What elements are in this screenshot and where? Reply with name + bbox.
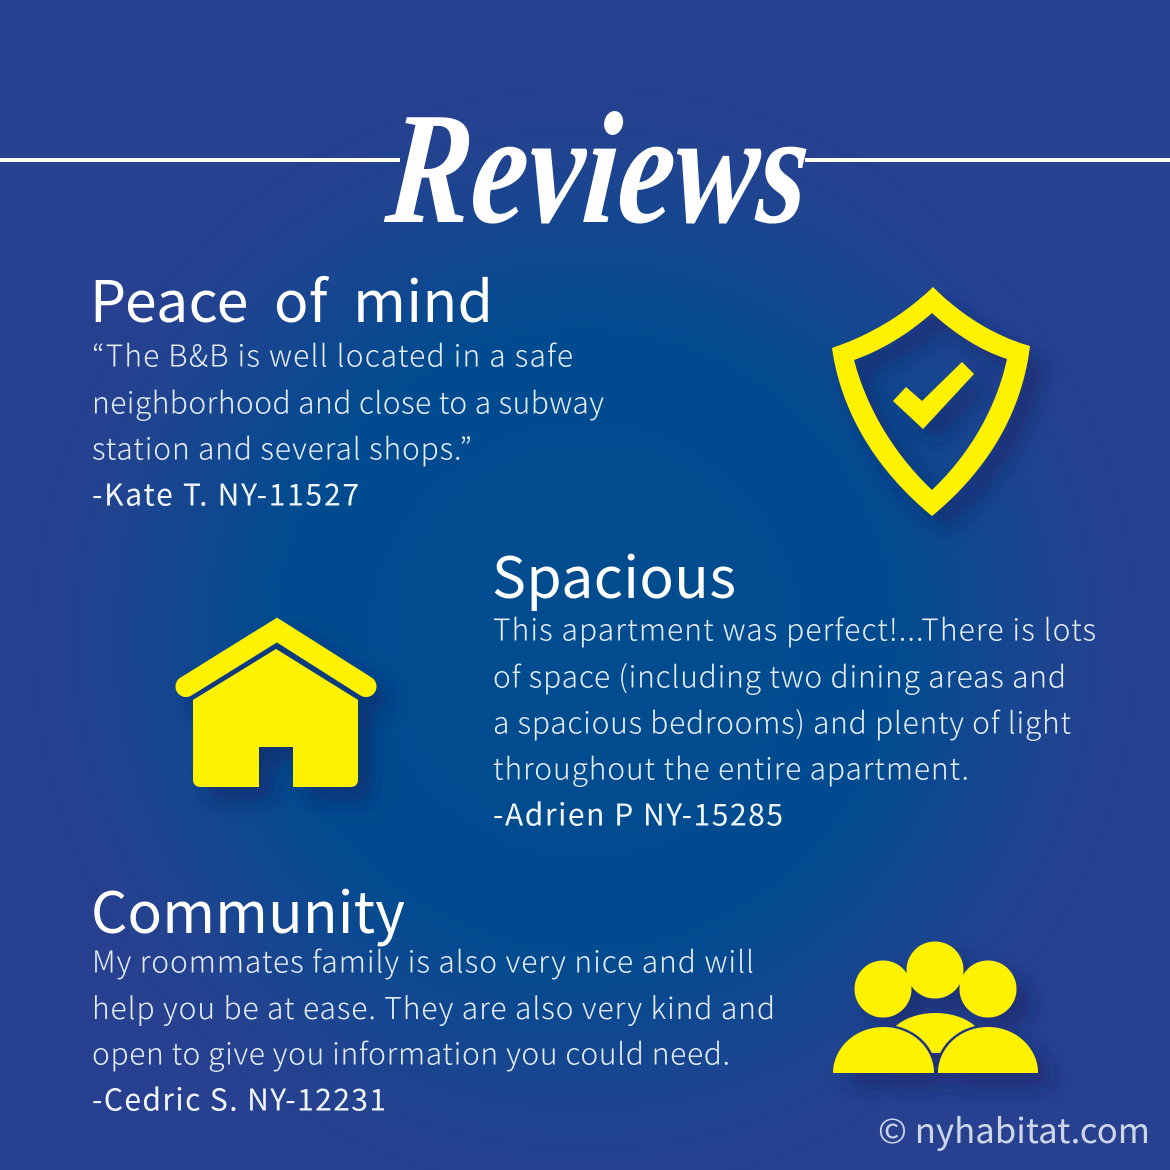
title rule right [805,158,1170,162]
quote: spacious [493,606,1096,789]
icon: group of people [833,942,1038,1073]
icon: shield with check mark [832,287,1030,516]
heading: peace of mind: Peace of mind [90,257,493,339]
attribution: Cedric S.: -Cedric S. NY-12231 [92,1076,386,1120]
panel: peace of mind [90,257,604,515]
quote: community: My roommates family is also very nice and will [92,938,754,982]
quote: spacious: a spacious bedrooms) and plenty of light [493,698,1071,742]
title: Reviews [380,79,816,257]
panel: community [91,868,775,1120]
quote: community: help you be at ease. They are also very kind and [92,984,775,1028]
quote: spacious: of space (including two dining areas and [493,652,1066,696]
attribution: Kate T.: -Kate T. NY-11527 [92,471,359,515]
quote: peace of mind [92,332,604,469]
heading: spacious: Spacious [492,533,736,615]
quote: spacious: This apartment was perfect!...There is lots [493,606,1096,650]
panel: spacious [492,533,1096,835]
title rule left [0,158,400,162]
heading: community: Community [91,868,405,950]
quote: spacious: throughout the entire apartment. [493,745,969,789]
quote: community: open to give you information you could need. [92,1030,730,1074]
quote: community [92,938,775,1074]
attribution: Adrien P: -Adrien P NY-15285 [493,791,783,835]
watermark: © nyhabitat.com [878,1104,1150,1153]
quote: peace of mind: station and several shops.” [92,425,472,469]
quote: peace of mind: “The B&B is well located in a safe [92,332,573,376]
icon: house [186,630,366,787]
quote: peace of mind: neighborhood and close to a subway [92,378,604,422]
